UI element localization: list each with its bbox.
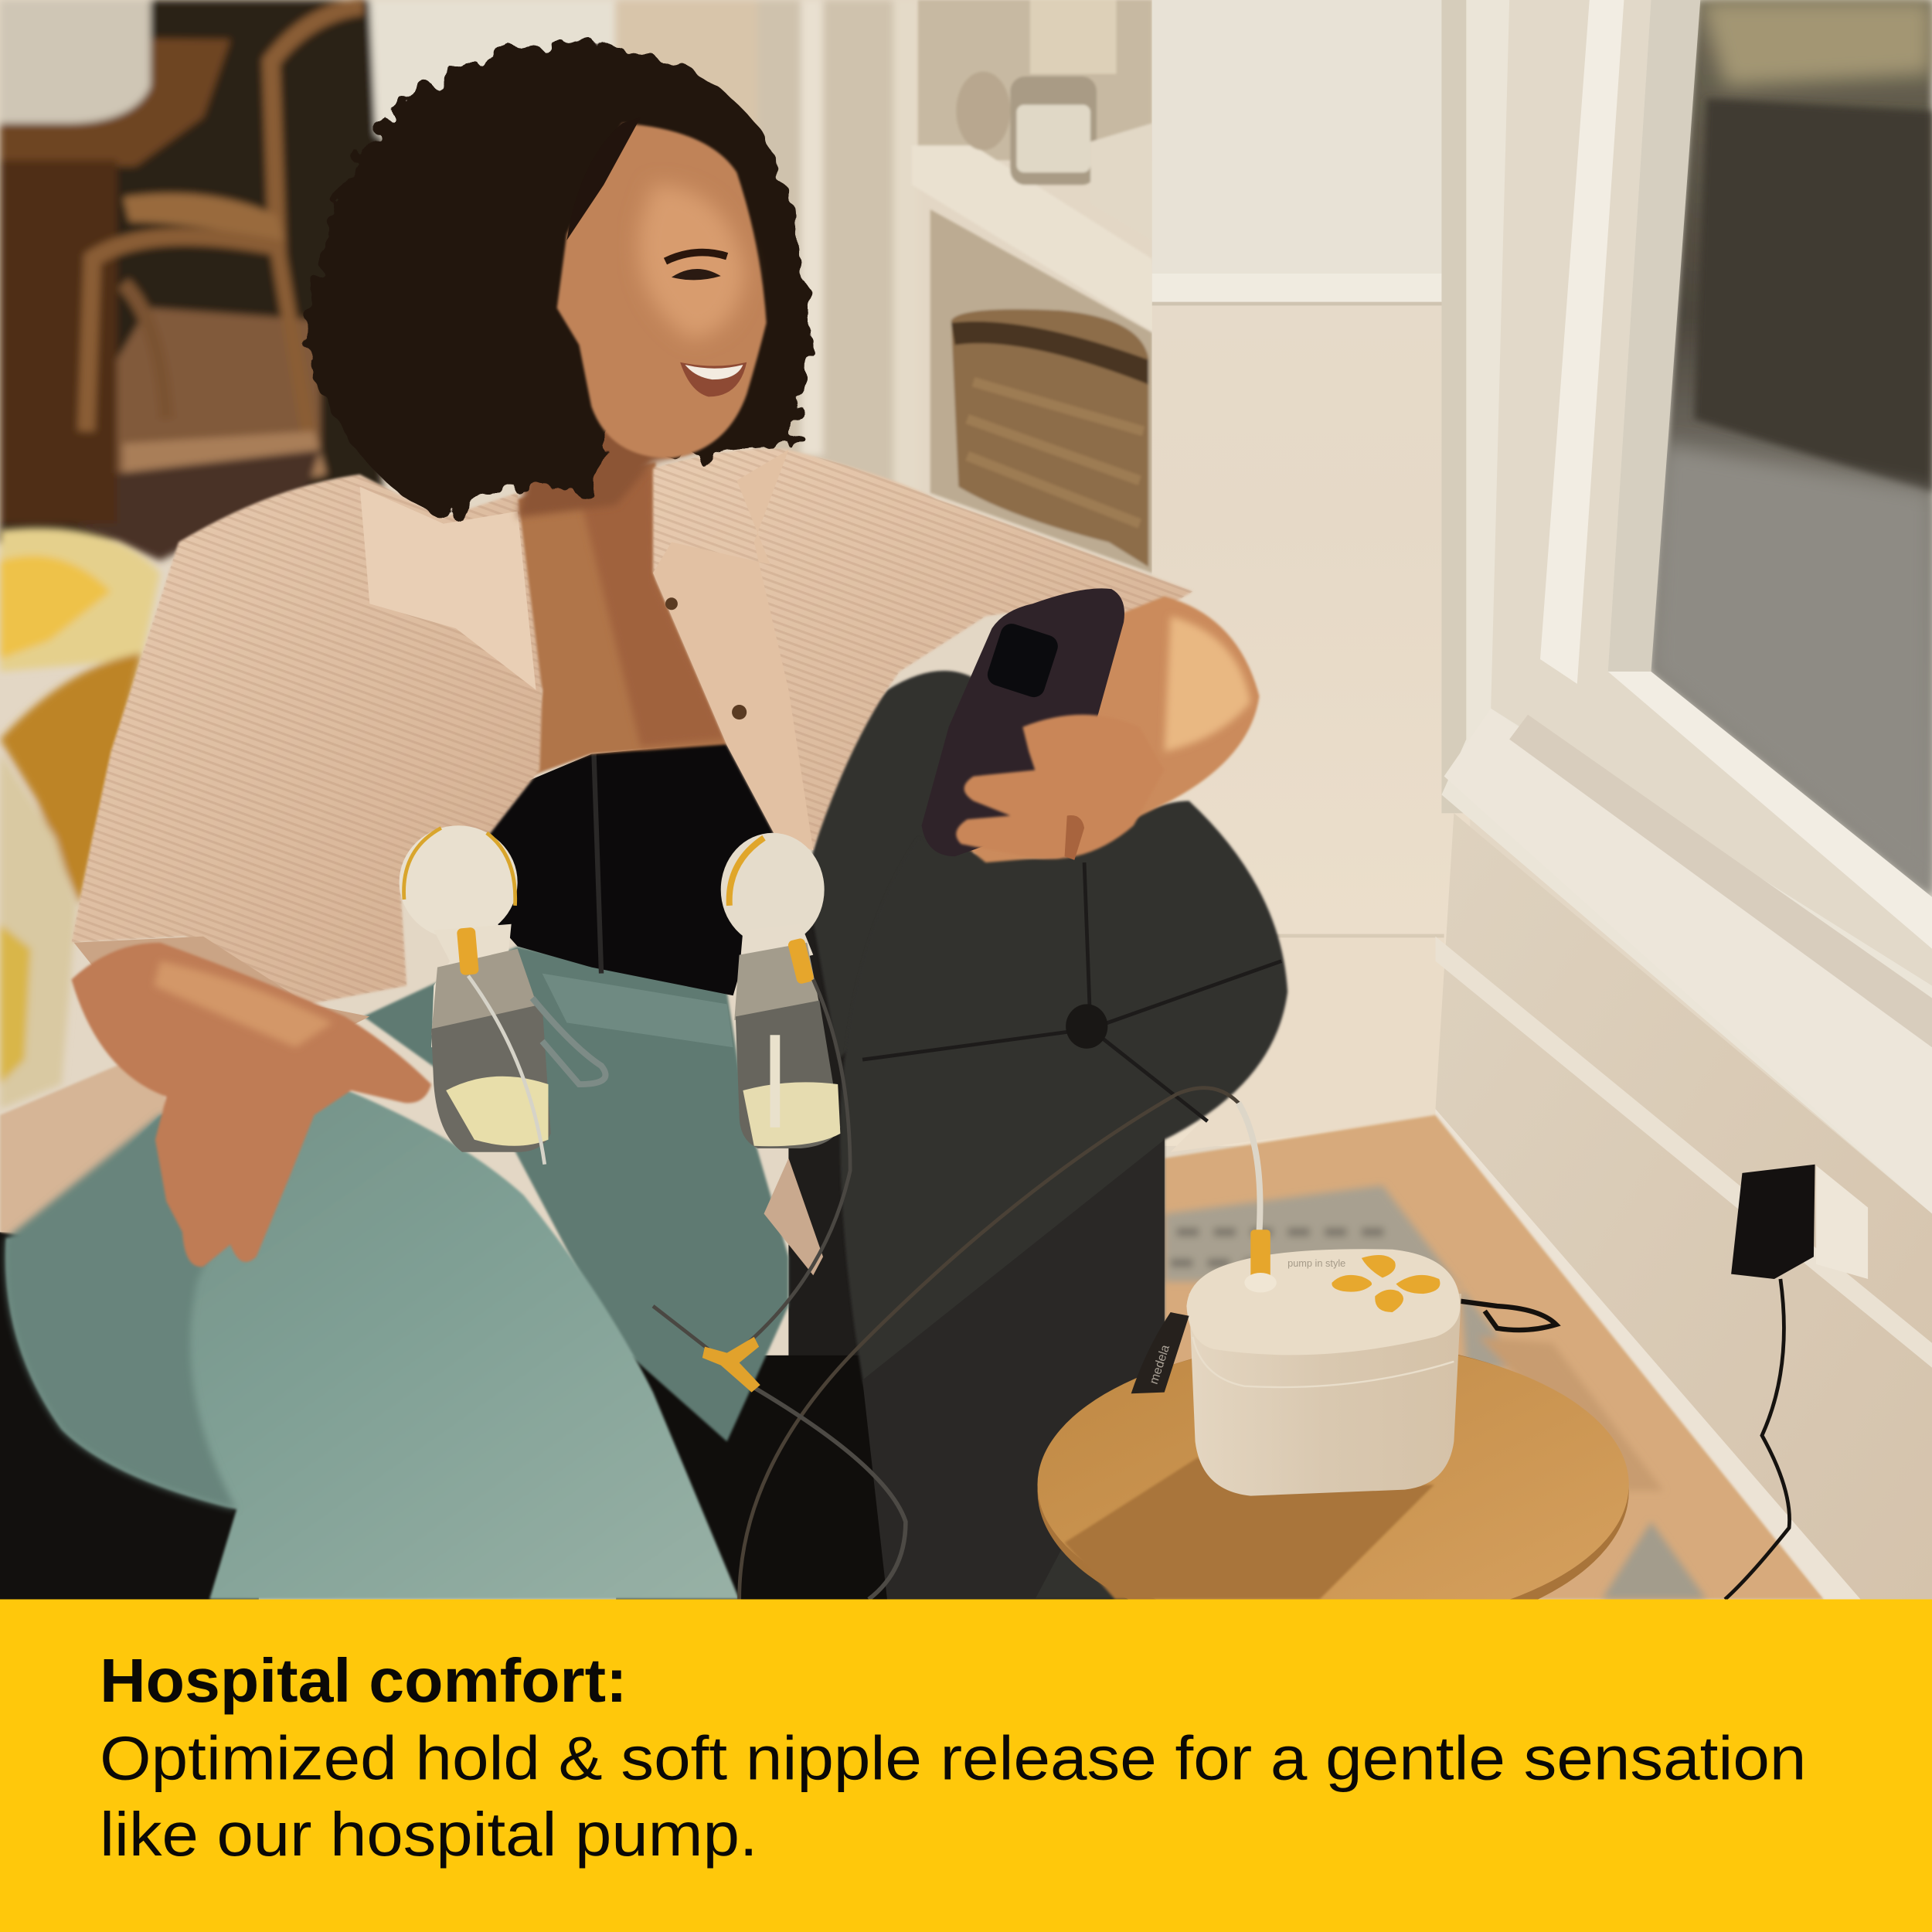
table shadow: [1065, 1458, 1434, 1600]
chest skin: [450, 462, 730, 776]
yellow tube connector: [787, 937, 815, 985]
window sill: [1444, 753, 1461, 780]
bottle: [736, 1001, 840, 1148]
body text line one: Optimized hold & soft nipple release for a gentle sensation: [100, 1723, 1806, 1792]
right shirt lower hem: [764, 1158, 823, 1275]
yellow Y connector: [702, 1337, 760, 1393]
pump shield: [400, 825, 518, 939]
pants waist: [363, 946, 788, 1441]
eye and brow: [665, 253, 727, 261]
left breast pump: [400, 825, 551, 1165]
jars on shelf: [1010, 77, 1097, 185]
white pillar: [1152, 0, 1471, 1152]
yellow tube connector: [457, 927, 479, 975]
smile: [680, 362, 747, 396]
right forearm: [955, 597, 1259, 862]
smartphone held in hand: [922, 588, 1165, 860]
hair over forehead: [566, 117, 641, 240]
wood floor: [1165, 1115, 1824, 1600]
side table: [1037, 1341, 1629, 1641]
face: [557, 123, 767, 458]
wicker basket: [951, 309, 1148, 566]
pump motor unit: medela: [1148, 1343, 1172, 1386]
milk: [743, 1082, 840, 1146]
pump shield: [721, 833, 825, 946]
shirt right panel and sleeve: [653, 448, 1192, 850]
pillows on the left: [0, 528, 160, 1109]
curtain and trim column: [614, 0, 893, 480]
unit body: [1189, 1294, 1461, 1496]
collar: [734, 943, 819, 1020]
milk: [446, 1077, 549, 1146]
hair: [308, 42, 809, 518]
body text line two: like our hospital pump.: [100, 1800, 758, 1869]
patterned rug: [1165, 1185, 1706, 1600]
brand tag: [1131, 1312, 1189, 1393]
wall socket and adapter: [1725, 1165, 1868, 1600]
unit lid: [1186, 1249, 1460, 1355]
control buttons: [1332, 1275, 1372, 1292]
power cable: [1460, 1301, 1556, 1330]
right breast pump: [721, 833, 840, 1148]
heading: Hospital comfort:: [100, 1646, 628, 1715]
dining room in the background: [0, 0, 616, 560]
shirt left panel: [0, 474, 543, 1238]
black top: [481, 742, 779, 995]
woman: [0, 42, 1259, 1600]
tubing: [653, 980, 1260, 1600]
yellow port: [1250, 1230, 1270, 1281]
lid label: pump in style: [1287, 1257, 1345, 1269]
sofa back: [807, 671, 974, 1060]
neck: [518, 406, 727, 518]
sofa: [0, 671, 1287, 1600]
wall under the window: [1435, 813, 1932, 1600]
bottle: [431, 1004, 551, 1152]
caption band: [0, 1600, 1932, 1932]
pump motor unit: [1131, 1230, 1556, 1496]
window glass view: [1651, 0, 1932, 897]
left arm and hand: [71, 943, 431, 1267]
built-in shelf with basket: [912, 0, 1165, 573]
sofa rolled arm: [840, 801, 1287, 1600]
fingers over phone: [956, 715, 1165, 859]
green leg: [5, 1082, 740, 1600]
window frame and glass: [1441, 0, 1932, 1213]
drawstring: [532, 998, 606, 1084]
collar: [431, 949, 539, 1035]
